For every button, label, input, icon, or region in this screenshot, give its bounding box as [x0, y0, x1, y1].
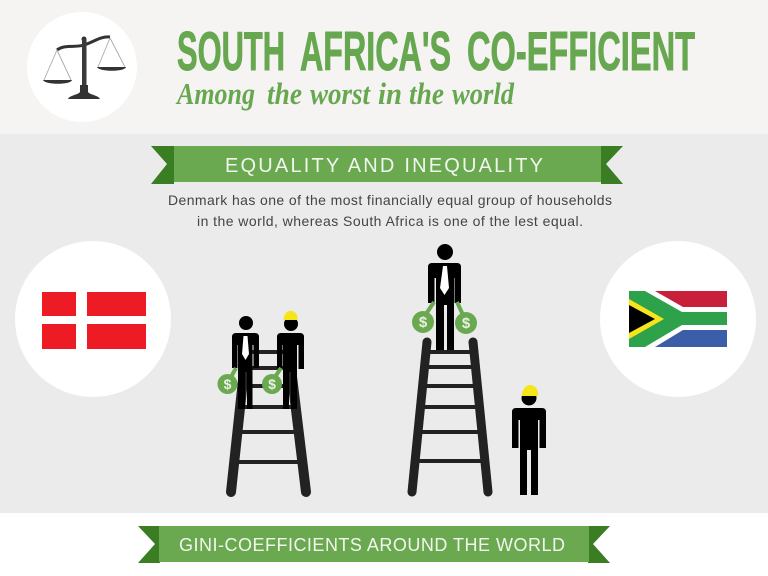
banner: gini-coefficients around the world: [138, 526, 610, 563]
figure: businessman with two money bags: $: [462, 315, 471, 332]
title: [177, 20, 695, 82]
text block: intro: Denmark has one of the most financially equal group of households: [168, 192, 612, 208]
illustration: equal ladder with two figures: [218, 311, 306, 492]
icon: balance scale in white circle: [27, 12, 137, 122]
subtitle: [175, 76, 514, 111]
title: SOUTH: [177, 20, 285, 82]
subtitle: the: [409, 76, 444, 111]
flag: Denmark: [15, 241, 171, 397]
figure: businessman with two money bags: $: [419, 314, 428, 331]
banner: gini-coefficients around the world: GINI-COEFFICIENTS AROUND THE WORLD: [179, 535, 565, 555]
flag: South Africa: [600, 241, 756, 397]
banner: equality and inequality: [151, 146, 623, 184]
text block: intro: in the world, whereas South Africa is one of the lest equal.: [197, 213, 583, 229]
figure: businessman with money bag: $: [224, 376, 232, 392]
subtitle: Among: [175, 76, 255, 111]
banner: equality and inequality: EQUALITY AND INEQUALITY: [225, 155, 543, 177]
figure: worker on the ground: [512, 385, 546, 495]
figure: businessman with money bag: [218, 316, 259, 409]
subtitle: the: [267, 76, 302, 111]
illustration: unequal ladder with two figures: [412, 244, 546, 495]
title: AFRICA'S: [300, 20, 451, 82]
subtitle: worst: [310, 76, 371, 111]
text block: intro: [168, 192, 612, 229]
figure: worker with money bag: $: [268, 376, 276, 392]
subtitle: world: [452, 76, 514, 111]
ladder: South Africa: [412, 342, 488, 492]
subtitle: in: [378, 76, 402, 111]
ladder: Denmark: [231, 352, 306, 492]
figure: businessman with two money bags: [412, 244, 477, 350]
figure: worker with money bag: [262, 311, 304, 409]
